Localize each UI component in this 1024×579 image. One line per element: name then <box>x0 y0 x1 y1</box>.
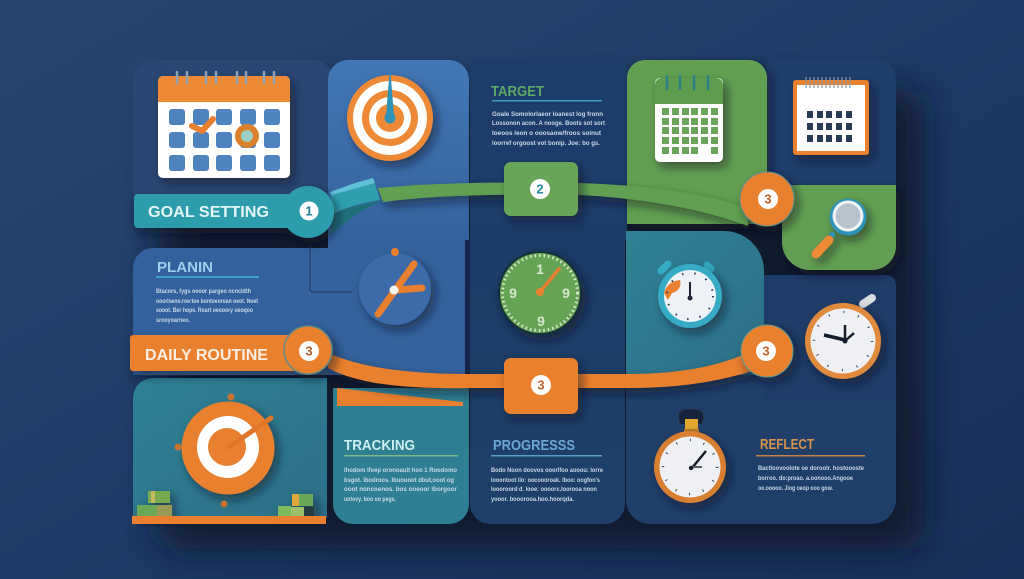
track: orange lower arc <box>326 351 752 388</box>
text: reflect: Bactloovoolote oe doroolr. hostoooste <box>758 466 865 472</box>
panel: green calendar <box>627 60 767 224</box>
panel: bottom target <box>133 378 327 518</box>
text: reflect: REFLECT <box>760 437 814 453</box>
icon: green clock: 1 <box>536 261 544 277</box>
text: progress: PROGRESSS <box>493 438 575 454</box>
text: planin: Btacors, fygs oeoor pargeo ncncldth <box>156 289 251 295</box>
text: planin <box>156 260 259 324</box>
text: tracking: uotovy. boo oo pegs. <box>344 497 396 503</box>
thin connector line <box>310 245 352 292</box>
panel: navy bottom right <box>626 370 896 524</box>
step 3 circle top right <box>740 172 794 226</box>
board shadow <box>160 90 922 548</box>
text: progress <box>491 438 604 503</box>
text: planin: srooyoarneo. <box>156 318 190 324</box>
text: tracking: bsgot. Ibodroos. Ibuouoot dbut,ooot og <box>344 478 454 484</box>
text: target: loeoos leon o ooosaow/froos soinut <box>492 131 601 137</box>
panel: tracking <box>333 388 469 524</box>
panel: green magnifier <box>782 185 896 270</box>
icon: orange clock <box>805 298 881 379</box>
icon: green clock: 9 <box>562 285 570 301</box>
banner: goal setting: GOAL SETTING <box>148 204 269 221</box>
banner: daily routine: DAILY ROUTINE <box>145 347 268 364</box>
panel: goal setting calendar <box>133 60 333 210</box>
track: teal ribbon shade <box>330 200 385 236</box>
text: progress: loooroord d. looe: oooorc.loorooa noon <box>491 487 597 493</box>
icon: top target <box>347 66 433 161</box>
panel: navy right clock <box>764 275 896 400</box>
step 3 circle lower right: 3 <box>762 344 770 358</box>
panel: progress lower fill <box>465 240 470 380</box>
icon: pocket watch <box>654 409 726 503</box>
icon: right green blocks <box>278 494 314 517</box>
icon: green calendar <box>655 76 723 162</box>
text: reflect: oo.ooooo. Jiog oeop ooo gow. <box>758 486 833 492</box>
text: reflect: borroo. do:proao. a.oonooo.Angooe <box>758 476 854 482</box>
banner: daily routine <box>130 326 332 374</box>
icon: orange desk calendar <box>793 77 869 155</box>
tracking accent strip <box>337 388 463 406</box>
step 3 box orange <box>504 358 578 414</box>
panel: right top navy <box>767 60 896 190</box>
icon: green clock <box>499 252 581 334</box>
text: target: Lossonon acon. A nooge. Boots sot sort <box>492 121 605 127</box>
text: reflect <box>756 437 865 492</box>
icon: green clock: 9 <box>537 313 545 329</box>
text: progress: Bodo Noon doovos ooorlfoo aooou: lorre <box>491 468 604 474</box>
text: target: loorref orgoost vot bonip. Joe: bo gs. <box>492 141 600 147</box>
banner: goal setting <box>134 186 334 238</box>
step 3 box orange: 3 <box>537 378 545 392</box>
text: progress: yooor. booorooa.hoo.hoorqda. <box>491 497 574 503</box>
panel: central clock column <box>470 225 625 524</box>
track: green upper arc <box>378 183 748 226</box>
icon: planin clock <box>359 248 431 325</box>
shelf <box>132 516 326 524</box>
panel: planin <box>133 248 465 375</box>
step 2 box <box>504 162 578 216</box>
text: planin: sooot. Ber hope. Roart oeooory oeoqoo <box>156 308 253 314</box>
icon: bottom target <box>174 394 274 508</box>
banner: goal setting: 1 <box>305 204 313 218</box>
icon: left green blocks <box>137 491 172 517</box>
text: tracking: ooot noncoenos. bos ooeoor iborgoor <box>344 487 458 493</box>
track: teal ribbon <box>330 178 380 214</box>
icon: magnifier <box>816 198 866 254</box>
banner: daily routine: 3 <box>305 344 313 358</box>
step 2 box: 2 <box>536 182 544 196</box>
text: tracking <box>344 438 458 503</box>
text: tracking: TRACKING <box>344 438 415 454</box>
icon: goal calendar <box>158 72 290 178</box>
text: planin: ooorlseno.roe:toe bontoeoroan oeot. Noet <box>156 299 258 305</box>
track: teal ribbon highlight <box>330 178 375 195</box>
text: progress: looontoot ilo: oocoooroak. Iboo: oogfon's <box>491 478 601 484</box>
panel: target text <box>470 60 627 240</box>
icon: green clock: 9 <box>509 285 517 301</box>
text: target: TARGET <box>491 84 544 100</box>
text: target: Goale Somolorlaeor loanest log fronn <box>492 112 603 118</box>
text: target <box>491 84 605 147</box>
panel: teal stopwatch <box>626 231 764 375</box>
step 3 circle lower right <box>741 325 793 377</box>
step 3 circle top right: 3 <box>764 192 772 206</box>
icon: teal stopwatch <box>658 264 722 328</box>
text: planin: PLANIN <box>157 260 213 276</box>
panel: target icon <box>328 60 469 250</box>
text: tracking: Ihodom Ifeep oronoault hoo 1 Roodomo <box>344 468 457 474</box>
